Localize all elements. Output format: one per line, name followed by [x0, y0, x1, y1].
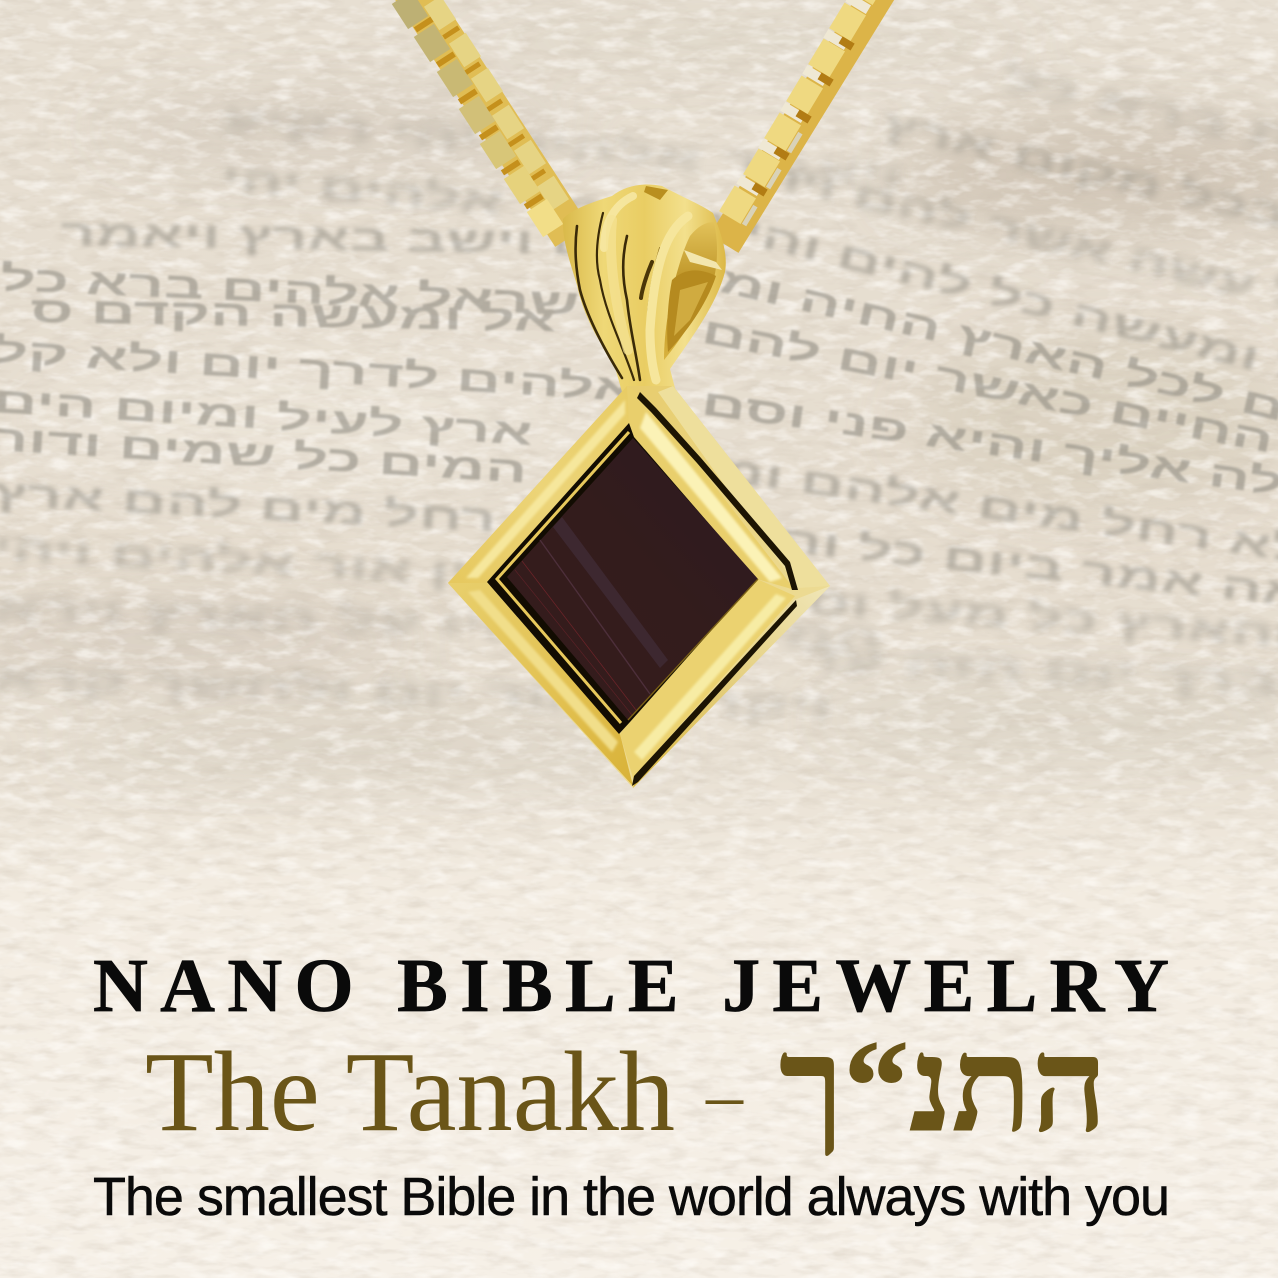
upper-right plate facet — [658, 386, 830, 588]
background: parchment with blurred Hebrew text: אל ומעשה הקדם ס — [30, 289, 556, 339]
chain: left strand — [392, 0, 572, 237]
background: parchment with blurred Hebrew text: הכל ובין אור אלהים ויהי — [0, 528, 661, 603]
heading: The Tanakh — [145, 1014, 1107, 1159]
background: parchment with blurred Hebrew text: אלהים וישב בארץ ויאמר — [60, 212, 731, 265]
pendant bail — [563, 184, 726, 392]
background: parchment with blurred Hebrew text: ולא רחל מים להם ארץ — [0, 472, 611, 545]
black shadow lines on right side — [637, 392, 798, 590]
background: parchment with blurred Hebrew text: המים אשר היו על הארץ וירא — [0, 586, 883, 659]
back plate — [448, 386, 830, 788]
heading: The Tanakh: – — [705, 1055, 744, 1135]
background: parchment with blurred Hebrew text: ארץ לעיל ומיום הים — [0, 379, 534, 453]
inner black bezel — [487, 423, 757, 734]
bail opening — [664, 222, 717, 360]
background: parchment with blurred Hebrew text: ויאמר אלהים יהי רקיע — [219, 96, 905, 198]
tagline: The smallest Bible in the world always with you — [93, 1167, 1170, 1227]
background: parchment with blurred Hebrew text: המים כל שמים ודור — [0, 417, 528, 490]
inner gold sliver — [497, 432, 629, 723]
stone streaks — [553, 517, 668, 668]
background: parchment with blurred Hebrew text: ויקרא לאור יום ולחשך קרא — [0, 656, 832, 727]
pendant setting: gold diamond frame — [448, 386, 830, 788]
chain: right strand — [719, 0, 888, 244]
frame highlights — [466, 400, 786, 760]
lower-right plate facet — [633, 586, 830, 788]
background: parchment with blurred Hebrew text: ישראל אלהים ברא כל — [0, 257, 599, 324]
heading: The Tanakh: The Tanakh — [145, 1028, 675, 1155]
stone — [507, 438, 758, 720]
bezel bands — [448, 386, 629, 583]
bail ribs — [576, 213, 660, 380]
heading: The Tanakh: התנ“ך — [779, 1014, 1107, 1159]
background: parchment with blurred Hebrew text: אלהים לדרך יום ולא קל — [0, 329, 637, 409]
title: Nano Bible Jewelry: NANO BIBLE JEWELRY — [93, 944, 1169, 1028]
background: parchment with blurred Hebrew text: ויאמר אלהים יהי — [219, 158, 688, 239]
